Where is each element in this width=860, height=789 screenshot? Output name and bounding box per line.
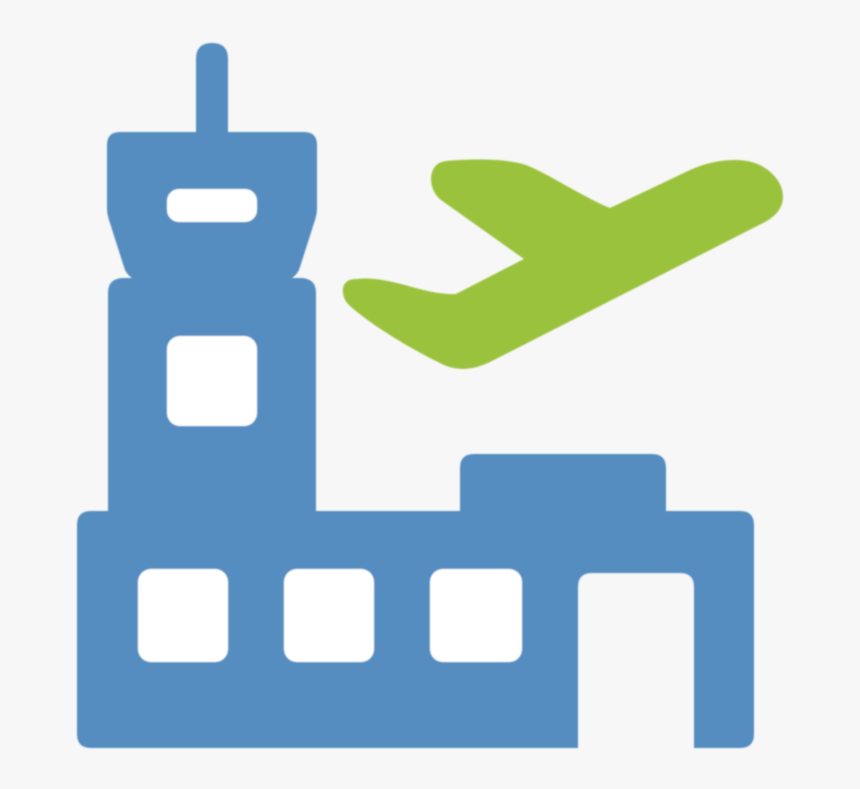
tower cab window: [167, 189, 257, 222]
terminal window middle: [284, 569, 374, 662]
terminal window left: [138, 569, 228, 662]
icon: green departing airplane: [343, 160, 783, 369]
icon: airport terminal and control tower: [77, 43, 754, 748]
terminal window right: [430, 569, 522, 662]
tower window: [167, 336, 257, 426]
control tower cab and shaft: [107, 132, 317, 520]
control tower antenna: [196, 43, 228, 140]
terminal building: [77, 454, 754, 748]
